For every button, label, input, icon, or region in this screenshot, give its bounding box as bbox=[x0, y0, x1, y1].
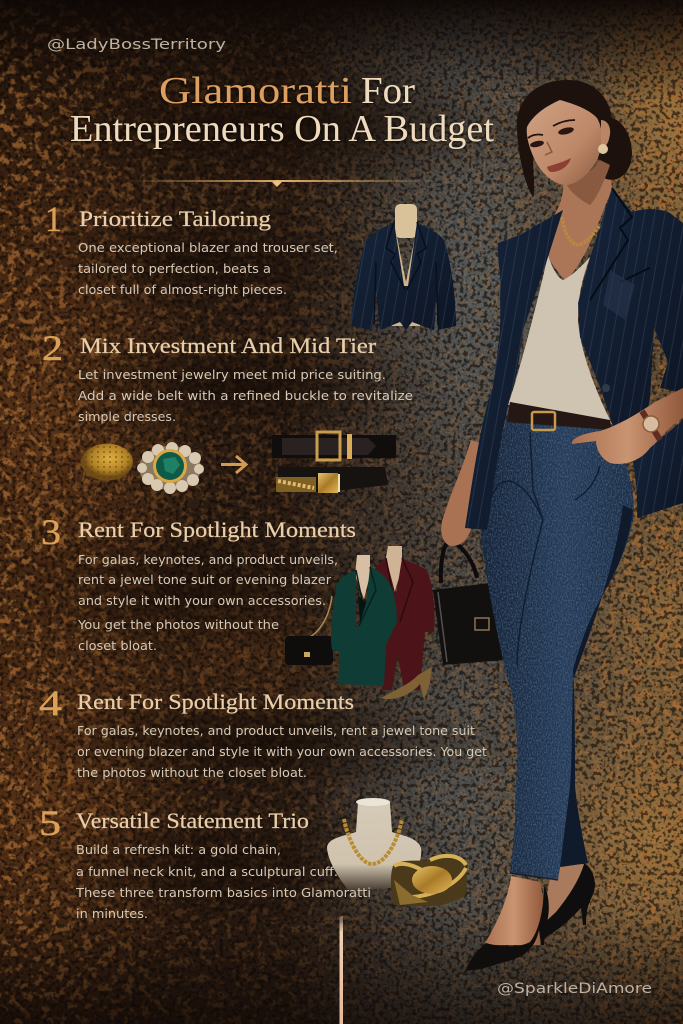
body 5: in minutes. bbox=[76, 907, 148, 922]
nose shadow bbox=[545, 142, 552, 155]
body 1: tailored to perfection, beats a bbox=[78, 262, 271, 277]
section 3: rent for spotlight moments bbox=[41, 512, 503, 700]
jeans bbox=[480, 402, 634, 880]
icon: gold dome ring bbox=[81, 444, 133, 480]
body 3: For galas, keynotes, and product unveils, bbox=[78, 553, 338, 568]
title bbox=[70, 70, 494, 150]
body 3 bbox=[77, 553, 338, 654]
arrow bbox=[221, 456, 246, 473]
body 4 bbox=[77, 724, 487, 781]
illustration: snakeskin heel bbox=[381, 667, 432, 700]
title: Glamoratti bbox=[159, 70, 352, 112]
ear bbox=[601, 120, 610, 148]
lips bbox=[547, 158, 571, 172]
forearm and hand in pocket bbox=[572, 388, 683, 464]
heading 2: Mix Investment And Mid Tier bbox=[80, 333, 377, 358]
illustration: black structured handbag bbox=[433, 541, 503, 665]
blazer lower flap bbox=[633, 420, 683, 518]
heading 4: Rent For Spotlight Moments bbox=[77, 689, 354, 714]
left arm and hand bbox=[441, 440, 486, 546]
body 5 bbox=[75, 843, 371, 922]
body 1: One exceptional blazer and trouser set, bbox=[78, 241, 338, 256]
body 4: or evening blazer and style it with your own accessories. You get bbox=[77, 745, 487, 760]
jeans dark leg panels bbox=[560, 505, 633, 867]
body 2: Let investment jewelry meet mid price suiting. bbox=[78, 368, 386, 383]
face bbox=[527, 100, 602, 185]
number 3: 3 bbox=[41, 512, 61, 552]
belt buckle bbox=[532, 412, 555, 430]
body 1: closet full of almost-right pieces. bbox=[78, 283, 287, 298]
body 4: For galas, keynotes, and product unveils, rent a jewel tone suit bbox=[77, 724, 475, 739]
illustration: burgundy suit on mannequin bbox=[370, 546, 435, 690]
section 1: prioritize tailoring bbox=[45, 199, 456, 330]
body 2 bbox=[78, 368, 413, 425]
figure: woman in navy blazer and jeans bbox=[441, 80, 683, 970]
illustration: sculptural gold cuff bbox=[391, 855, 467, 906]
body 1 bbox=[78, 241, 338, 298]
section 4: rent for spotlight moments bbox=[39, 683, 487, 781]
heading 5: Versatile Statement Trio bbox=[76, 808, 309, 833]
body 2: simple dresses. bbox=[78, 410, 176, 425]
cream top bbox=[508, 255, 612, 424]
body 4: the photos without the closet bloat. bbox=[77, 766, 307, 781]
gold necklace bbox=[562, 217, 600, 245]
body 3: and style it with your own accessories. bbox=[78, 594, 326, 609]
back leg shoe bbox=[538, 863, 595, 938]
number 4: 4 bbox=[39, 683, 62, 723]
neck shadow bbox=[565, 160, 610, 205]
section 2: mix investment and mid tier bbox=[42, 328, 413, 494]
front shoe bbox=[466, 886, 549, 970]
pearl earring bbox=[598, 144, 608, 154]
illustration: black chain clutch bbox=[285, 596, 333, 665]
number 2: 2 bbox=[42, 328, 63, 368]
body 3: closet bloat. bbox=[78, 639, 157, 654]
wristwatch bbox=[642, 411, 660, 440]
body 3: rent a jewel tone suit or evening blazer bbox=[78, 573, 332, 588]
body 5: These three transform basics into Glamoratti bbox=[75, 886, 371, 901]
body 5: a funnel neck knit, and a sculptural cuff. bbox=[76, 865, 338, 880]
heading 3: Rent For Spotlight Moments bbox=[78, 517, 356, 542]
body 3: You get the photos without the bbox=[77, 618, 279, 633]
illustration: black belt with gold buckle bbox=[272, 432, 396, 460]
heading 1: Prioritize Tailoring bbox=[79, 206, 271, 231]
neck and chest bbox=[540, 165, 612, 281]
handle: LadyBossTerritory: @LadyBossTerritory bbox=[47, 37, 227, 53]
title: Entrepreneurs On A Budget bbox=[70, 108, 494, 150]
illustration: green suit on mannequin bbox=[331, 555, 397, 686]
front foot bbox=[484, 876, 543, 945]
eyes bbox=[530, 126, 575, 148]
blazer left panel bbox=[465, 210, 563, 530]
title divider ornament bbox=[126, 180, 440, 187]
belt bbox=[507, 402, 612, 430]
illustration: knit bust with gold chain bbox=[327, 798, 421, 892]
handle: SparkleDiAmore: @SparkleDiAmore bbox=[497, 981, 652, 997]
illustration: pinstripe blazer on mannequin bbox=[351, 204, 456, 330]
number 1: 1 bbox=[45, 199, 62, 239]
jeans seams bbox=[488, 432, 600, 880]
blazer right panel bbox=[578, 188, 683, 432]
number 5: 5 bbox=[39, 803, 61, 843]
back leg ankle bbox=[542, 864, 584, 925]
brows bbox=[528, 120, 575, 138]
title: For bbox=[361, 70, 415, 112]
vertical accent line bbox=[340, 916, 343, 1024]
body 2: Add a wide belt with a refined buckle to revitalize bbox=[78, 389, 413, 404]
body 5: Build a refresh kit: a gold chain, bbox=[76, 843, 281, 858]
illustration: black belt with gold chain bbox=[276, 467, 388, 493]
hair back and bun bbox=[517, 80, 632, 197]
section 5: versatile statement trio bbox=[39, 798, 467, 922]
icon: emerald brooch bbox=[137, 442, 204, 494]
